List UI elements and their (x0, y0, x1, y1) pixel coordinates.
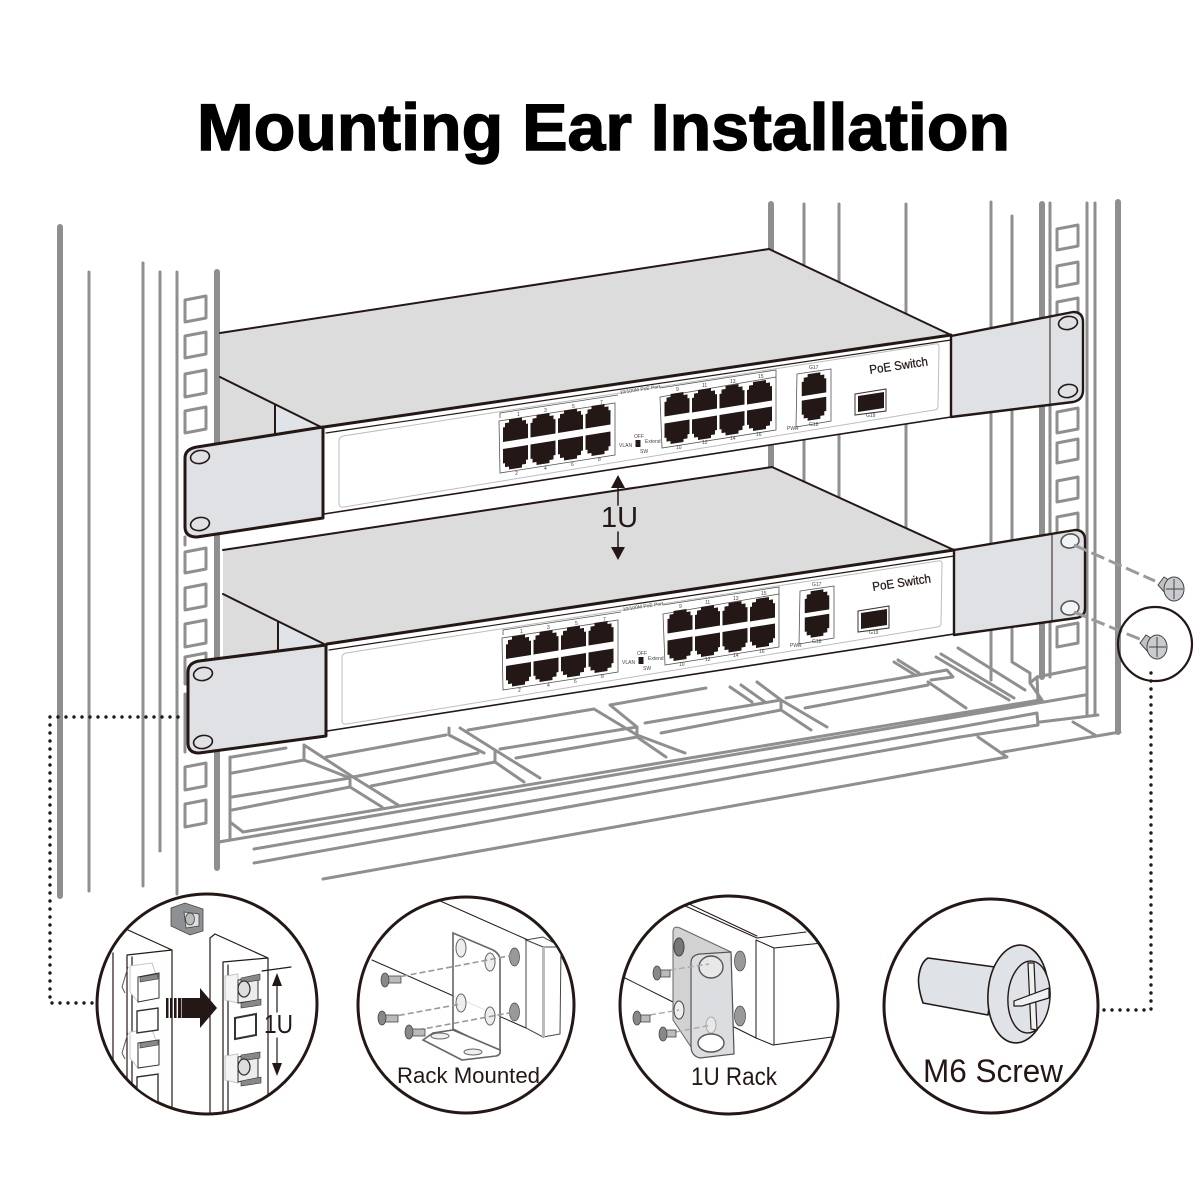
port block 1-8: 5 (572, 404, 575, 410)
rack bar (372, 900, 561, 1037)
port block 9-16: 11 (705, 600, 710, 606)
port block 1-8: 3 (544, 408, 547, 414)
uplink ports: G18 (809, 422, 819, 428)
VLAN switch: SW (640, 449, 648, 455)
screws (378, 973, 425, 1039)
strip bracket (691, 952, 734, 1058)
left ear (188, 645, 326, 753)
port block 9-16: 16 (756, 432, 762, 438)
port block 1-8: 5 (575, 621, 578, 627)
rack holes right (1057, 225, 1078, 647)
rack floor tray (219, 648, 1120, 879)
port block 1-8: 3 (547, 625, 550, 631)
port block 9-16: 10 (676, 445, 682, 451)
1U spacing marker (601, 475, 638, 560)
switch name: PoE Switch (868, 354, 929, 377)
detail circle: M6 screw (884, 899, 1098, 1113)
port block 1-8: 4 (544, 466, 547, 472)
dotted connector left (50, 717, 178, 1003)
port block 1-8: 7 (600, 400, 603, 406)
port block 9-16: 10 (679, 662, 685, 668)
rack bar (625, 903, 832, 1045)
port block 1-8: 2 (518, 688, 521, 694)
right ear (951, 312, 1083, 417)
uplink ports (787, 365, 831, 432)
height tick (262, 967, 291, 971)
uplink ports: PWR (790, 643, 802, 649)
VLAN switch: VLAN (622, 660, 635, 666)
1U label: 1U (264, 1009, 293, 1039)
port block 1-8 (502, 587, 779, 694)
left ear (185, 427, 323, 537)
VLAN switch: VLAN (619, 443, 632, 449)
port block 9-16: 9 (676, 387, 679, 393)
port block 9-16: 13 (730, 379, 736, 385)
screw head (985, 943, 1052, 1045)
port block 9-16: 11 (702, 383, 707, 389)
1U dimension arrows (272, 973, 282, 1076)
port block 9-16: 15 (758, 374, 764, 380)
port block 9-16: 14 (733, 653, 739, 659)
arrow (166, 988, 217, 1028)
cage nut (171, 903, 203, 935)
port block 9-16: 13 (733, 596, 739, 602)
VLAN switch: SW (643, 666, 651, 672)
icon: upper screw (1158, 577, 1184, 601)
port block 9-16: 9 (679, 604, 682, 610)
port block 9-16: 16 (759, 649, 765, 655)
port block 9-16: 14 (730, 436, 736, 442)
uplink ports: G18 (812, 639, 822, 645)
port block 9-16 (660, 374, 776, 451)
rack holes left (185, 296, 206, 827)
dotted connector right (1098, 673, 1151, 1010)
port block 9-16: 15 (761, 591, 767, 597)
port label: 10/100M PoE Port (619, 384, 661, 396)
side face (223, 594, 278, 662)
VLAN switch (622, 651, 664, 672)
VLAN switch (619, 434, 661, 455)
port block 1-8: 1 (517, 412, 520, 418)
VLAN switch: OFF (637, 651, 647, 657)
server rack frame (60, 202, 1118, 896)
caption: M6 Screw (923, 1053, 1064, 1089)
port block 1-8 (499, 370, 776, 477)
port block 1-8: 1 (520, 629, 523, 635)
VLAN switch: OFF (634, 434, 644, 440)
port block 9-16: 12 (705, 657, 711, 663)
port block 1-8: 6 (571, 462, 574, 468)
zoom circle around lower screw (1118, 607, 1192, 681)
dashed screw paths (650, 964, 711, 1032)
port block 1-8: 8 (601, 674, 604, 680)
uplink ports: G17 (812, 582, 822, 588)
port block 1-8: 6 (574, 679, 577, 685)
SFP port (855, 389, 886, 419)
caption: 1U Rack (691, 1063, 777, 1091)
VLAN switch: Extend (645, 439, 661, 445)
port label: 10/100M PoE Port (622, 601, 664, 613)
dashed screw paths (398, 955, 510, 1030)
lower PoE switch (188, 467, 1085, 753)
icon: lower screw (1140, 635, 1167, 659)
uplink ports: PWR (787, 426, 799, 432)
switch name: PoE Switch (871, 571, 932, 594)
screw insertion dashes (1074, 545, 1155, 640)
port block 1-8: 7 (603, 617, 606, 623)
detail circle: 1U rack (620, 896, 838, 1114)
title: Mounting Ear Installation (197, 90, 1010, 164)
front panel (324, 335, 951, 514)
caption: Rack Mounted (397, 1063, 540, 1088)
L bracket (422, 932, 501, 1061)
screw shaft (918, 958, 995, 1015)
top face (220, 249, 951, 428)
top face (223, 467, 954, 645)
port block 1-8: 8 (598, 457, 601, 463)
1U spacing marker: 1U (601, 502, 638, 534)
right ear (954, 530, 1085, 635)
right rack post (210, 934, 268, 1120)
detail circle: rack mounted (358, 897, 574, 1113)
port block 9-16 (663, 591, 779, 668)
screws (633, 966, 676, 1041)
upper PoE switch (185, 249, 1083, 537)
gray bracket (673, 927, 734, 1053)
detail circle: cage nuts 1U (97, 894, 317, 1120)
port block 9-16: 12 (702, 440, 708, 446)
SFP port: G19 (866, 413, 876, 419)
uplink ports (790, 582, 834, 649)
SFP port (858, 606, 889, 636)
port block 1-8: 4 (547, 683, 550, 689)
VLAN switch: Extend (648, 656, 664, 662)
port block 1-8: 2 (515, 471, 518, 477)
left rack post (113, 930, 172, 1120)
front panel (327, 550, 954, 731)
SFP port: G19 (869, 630, 879, 636)
side face (220, 377, 275, 445)
uplink ports: G17 (809, 365, 819, 371)
